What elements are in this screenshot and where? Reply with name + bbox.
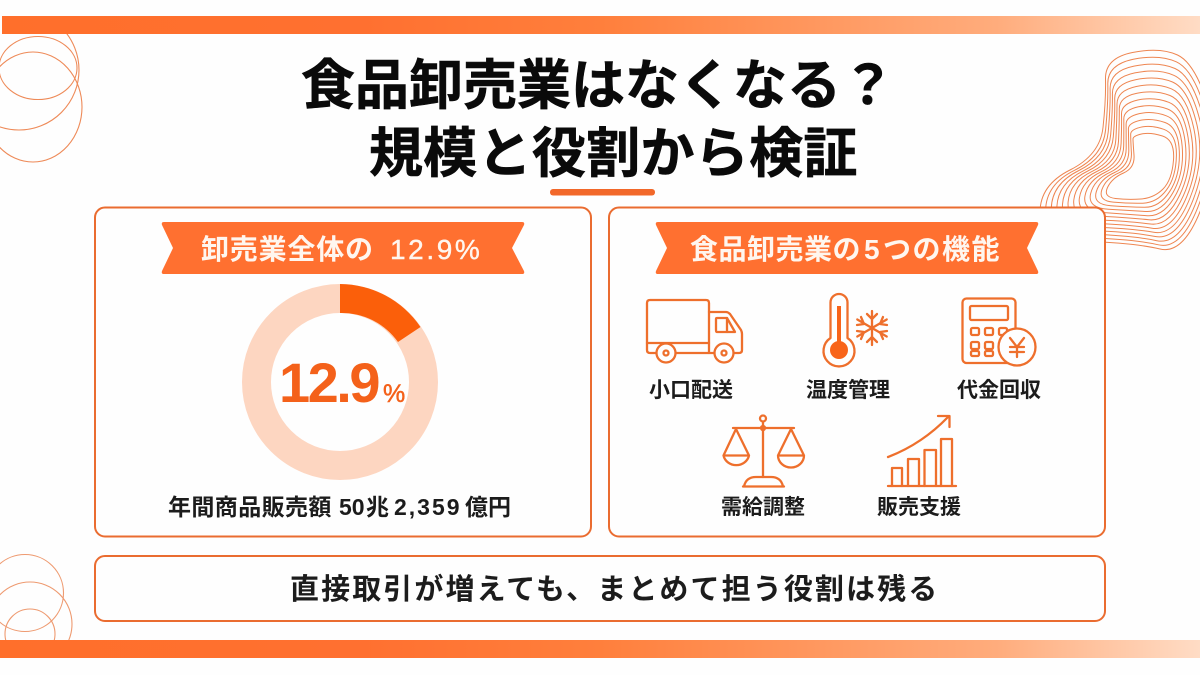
icon: rising bar chart: [888, 416, 956, 486]
annual sales caption: 年間商品販売額: [168, 494, 332, 520]
label: small-lot delivery: 小口配送: [649, 379, 733, 402]
label: payment collection: 代金回収: [957, 379, 1041, 402]
annual sales caption: 億円: [465, 494, 511, 520]
conclusion text: 直接取引が増えても、まとめて担う役割は残る: [290, 572, 939, 606]
banner: functions heading: 5: [864, 234, 880, 265]
icon: delivery truck: [647, 300, 742, 362]
panel: five functions: [609, 208, 1105, 536]
annual sales caption: 50: [339, 494, 365, 520]
banner: share heading: 12.9%: [390, 234, 482, 265]
title underline: [550, 189, 655, 196]
label: supply and demand adjustment: 需給調整: [721, 496, 805, 519]
decoration: top-left circles: [0, 34, 83, 162]
icon: calculator and yen coin: [962, 298, 1036, 366]
label: temperature control: 温度管理: [806, 379, 890, 402]
donut value: %: [383, 380, 405, 408]
banner: functions heading: [656, 222, 1038, 274]
banner: share heading: 卸売業全体の: [201, 234, 374, 265]
decoration: bottom-left circles: [0, 554, 73, 640]
panel: market share: [95, 208, 591, 536]
panel frame: [95, 208, 591, 536]
donut chart: [256, 284, 424, 466]
banner: functions heading: 食品卸売業の: [690, 234, 861, 265]
title: 食品卸売業はなくなる？: [301, 56, 895, 116]
bottom bar: [0, 640, 1200, 658]
icon: thermometer and snowflake: [823, 294, 887, 366]
decoration: contour line blob: [1040, 50, 1200, 250]
panel: conclusion: [95, 556, 1105, 621]
icon: balance scale: [724, 416, 804, 486]
top bar: [2, 16, 1200, 34]
panel frame: [609, 208, 1105, 536]
banner: share heading: [162, 222, 524, 274]
annual sales caption: 兆: [366, 494, 389, 520]
banner: functions heading: つの機能: [883, 234, 1001, 265]
annual sales caption: 2,359: [394, 494, 462, 520]
title: [301, 56, 895, 184]
donut value: 12.9: [279, 351, 379, 414]
title: 規模と役割から検証: [369, 124, 858, 184]
label: sales support: 販売支援: [877, 496, 961, 519]
